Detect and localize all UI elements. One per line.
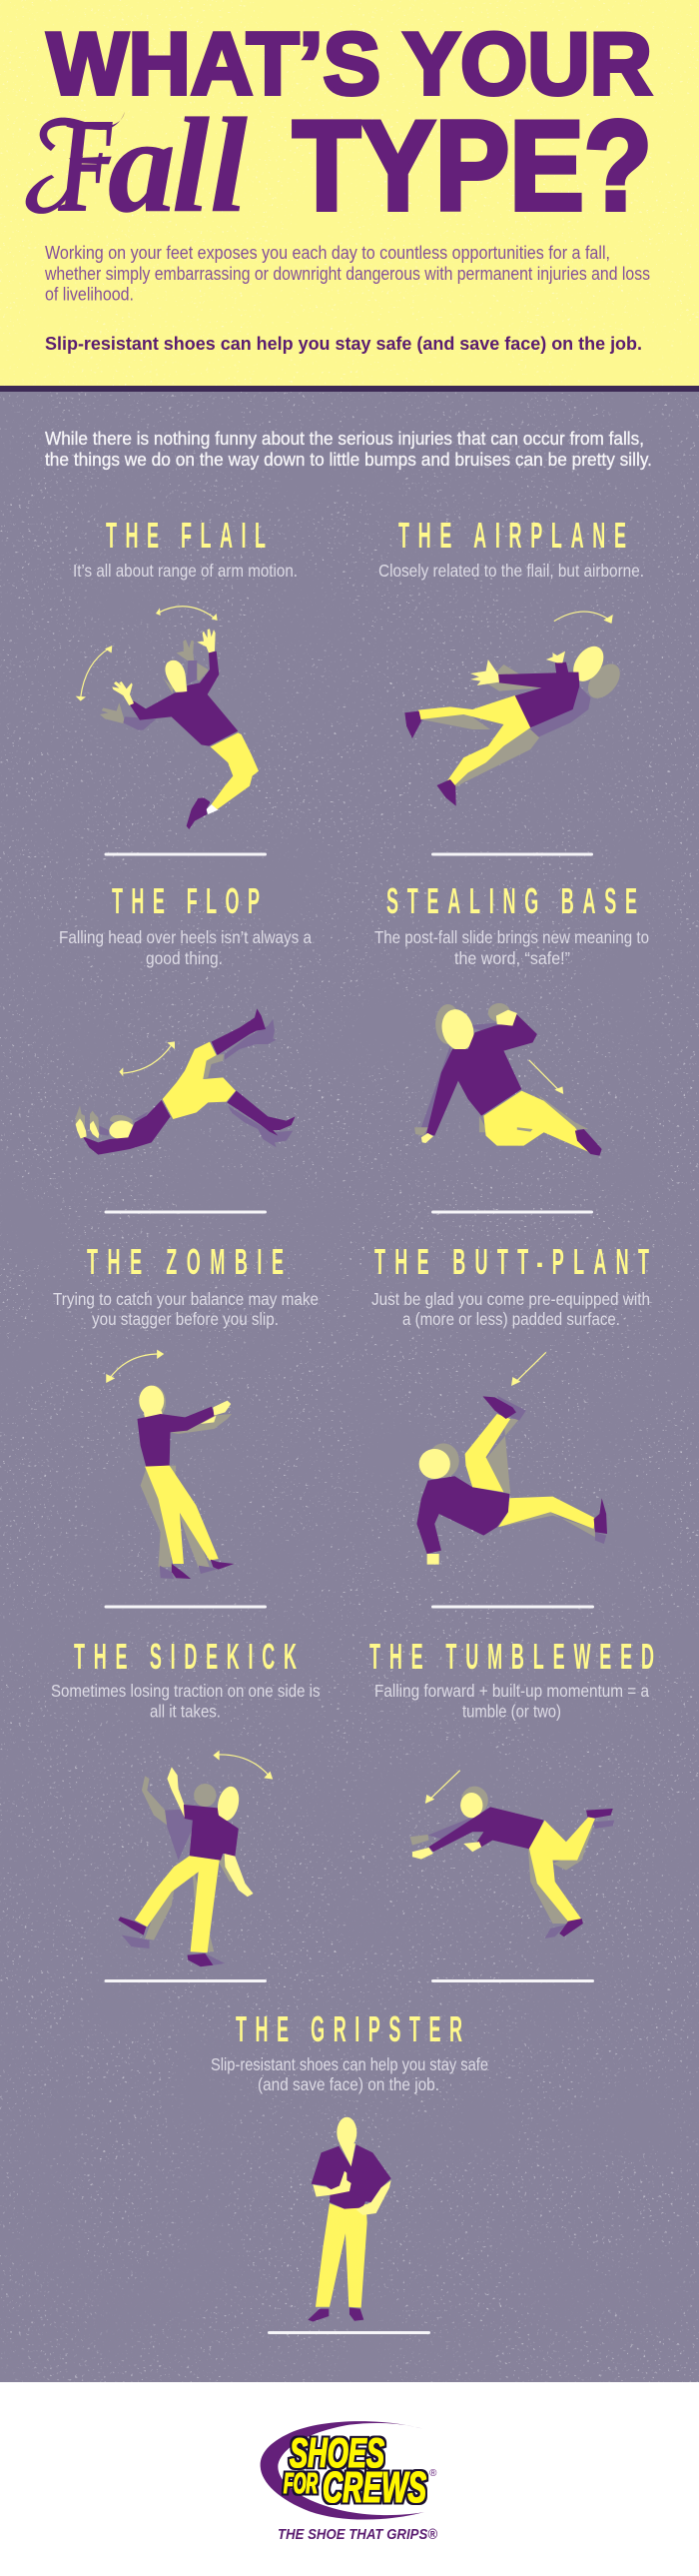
panel: the airplane [378,516,644,855]
heading: THE SIDEKICK [74,1637,297,1678]
logo: shoes for crews: FOR [284,2468,318,2500]
panel: the gripster [211,2009,488,2334]
panel: the tumbleweed [369,1637,654,1982]
figure: gripster [308,2117,391,2321]
description: you stagger before you slip. [92,1309,279,1329]
heading: THE TUMBLEWEED [369,1637,654,1678]
description: The post-fall slide brings new meaning to [374,927,649,947]
panel: stealing base [374,881,649,1213]
description: It’s all about range of arm motion. [73,561,298,581]
figure: flail [100,629,259,829]
figure: sidekick [118,1767,254,1966]
panel: the flop [59,881,312,1213]
heading: THE FLAIL [106,516,266,557]
figure: stealing base [414,1003,602,1156]
description [374,1681,649,1721]
arrow: flop [119,1041,175,1076]
description [211,2054,488,2094]
arrow: sidekick [213,1751,273,1780]
description: tumble (or two) [462,1701,561,1721]
description: Slip-resistant shoes can help you stay safe [211,2054,488,2074]
intro paragraph: Working on your feet exposes you each day to countless opportunities for a fall, [45,242,610,263]
description: good thing. [146,948,223,968]
description: Trying to catch your balance may make [53,1289,319,1309]
description [371,1289,650,1329]
arrow: stealing base [529,1060,563,1094]
description: (and save face) on the job. [258,2074,439,2094]
logo: shoes for crews [261,2421,437,2520]
panel: grey-purple background [0,386,699,2382]
description: Just be glad you come pre-equipped with [371,1289,650,1309]
heading: STEALING BASE [386,881,637,922]
figure: airplane [404,644,626,806]
description [59,927,312,968]
arrow: tumbleweed [425,1771,460,1804]
bold statement: Slip-resistant shoes can help you stay safe (and save face) on the job. [45,333,642,354]
description: Falling head over heels isn’t always a [59,927,312,947]
lead paragraph: While there is nothing funny about the serious injuries that can occur from falls, [45,428,644,449]
description [374,927,649,968]
heading: THE ZOMBIE [87,1242,284,1283]
arrow: zombie [106,1350,164,1383]
title line one: WHAT’S YOUR [47,14,652,113]
arrow: butt-plant [511,1352,546,1386]
logo: shoes for crews: ® [429,2468,437,2479]
figure: zombie [137,1386,234,1579]
heading: THE AIRPLANE [398,516,626,557]
intro paragraph [44,242,650,304]
description [53,1289,319,1329]
figure: butt-plant [416,1396,607,1565]
heading: THE BUTT-PLANT [374,1242,649,1283]
panel: the butt-plant [371,1242,650,1609]
heading: THE FLOP [112,881,260,922]
panel: footer [0,2382,699,2576]
logo: shoes for crews: SHOES [290,2429,384,2476]
title script word [26,91,248,241]
description: a (more or less) padded surface. [402,1309,620,1329]
description: Falling forward + built-up momentum = a [374,1681,649,1701]
tagline: THE SHOE THAT GRIPS® [278,2527,437,2543]
description: all it takes. [150,1701,221,1721]
lead paragraph: the things we do on the way down to little bumps and bruises can be pretty silly. [45,449,652,470]
arrow: airplane [554,612,613,624]
arrows: flail [76,607,218,701]
heading: THE GRIPSTER [236,2009,462,2050]
title line two: TYPE? [293,94,652,236]
panel: the flail [73,516,298,855]
description: Closely related to the flail, but airborne. [378,561,644,581]
title script word: F [57,91,114,241]
panel: yellow header [0,0,699,387]
description [51,1681,321,1721]
description: the word, “safe!” [454,948,570,968]
panel: the sidekick [51,1637,321,1982]
lead paragraph [45,428,652,470]
panel: the zombie [53,1242,319,1609]
logo: shoes for crews: CREWS [323,2463,426,2512]
title script word: all [108,91,248,241]
intro paragraph: of livelihood. [45,284,134,304]
figure: flop [76,1008,296,1155]
figure: tumbleweed [410,1787,614,1938]
description: Sometimes losing traction on one side is [51,1681,321,1701]
